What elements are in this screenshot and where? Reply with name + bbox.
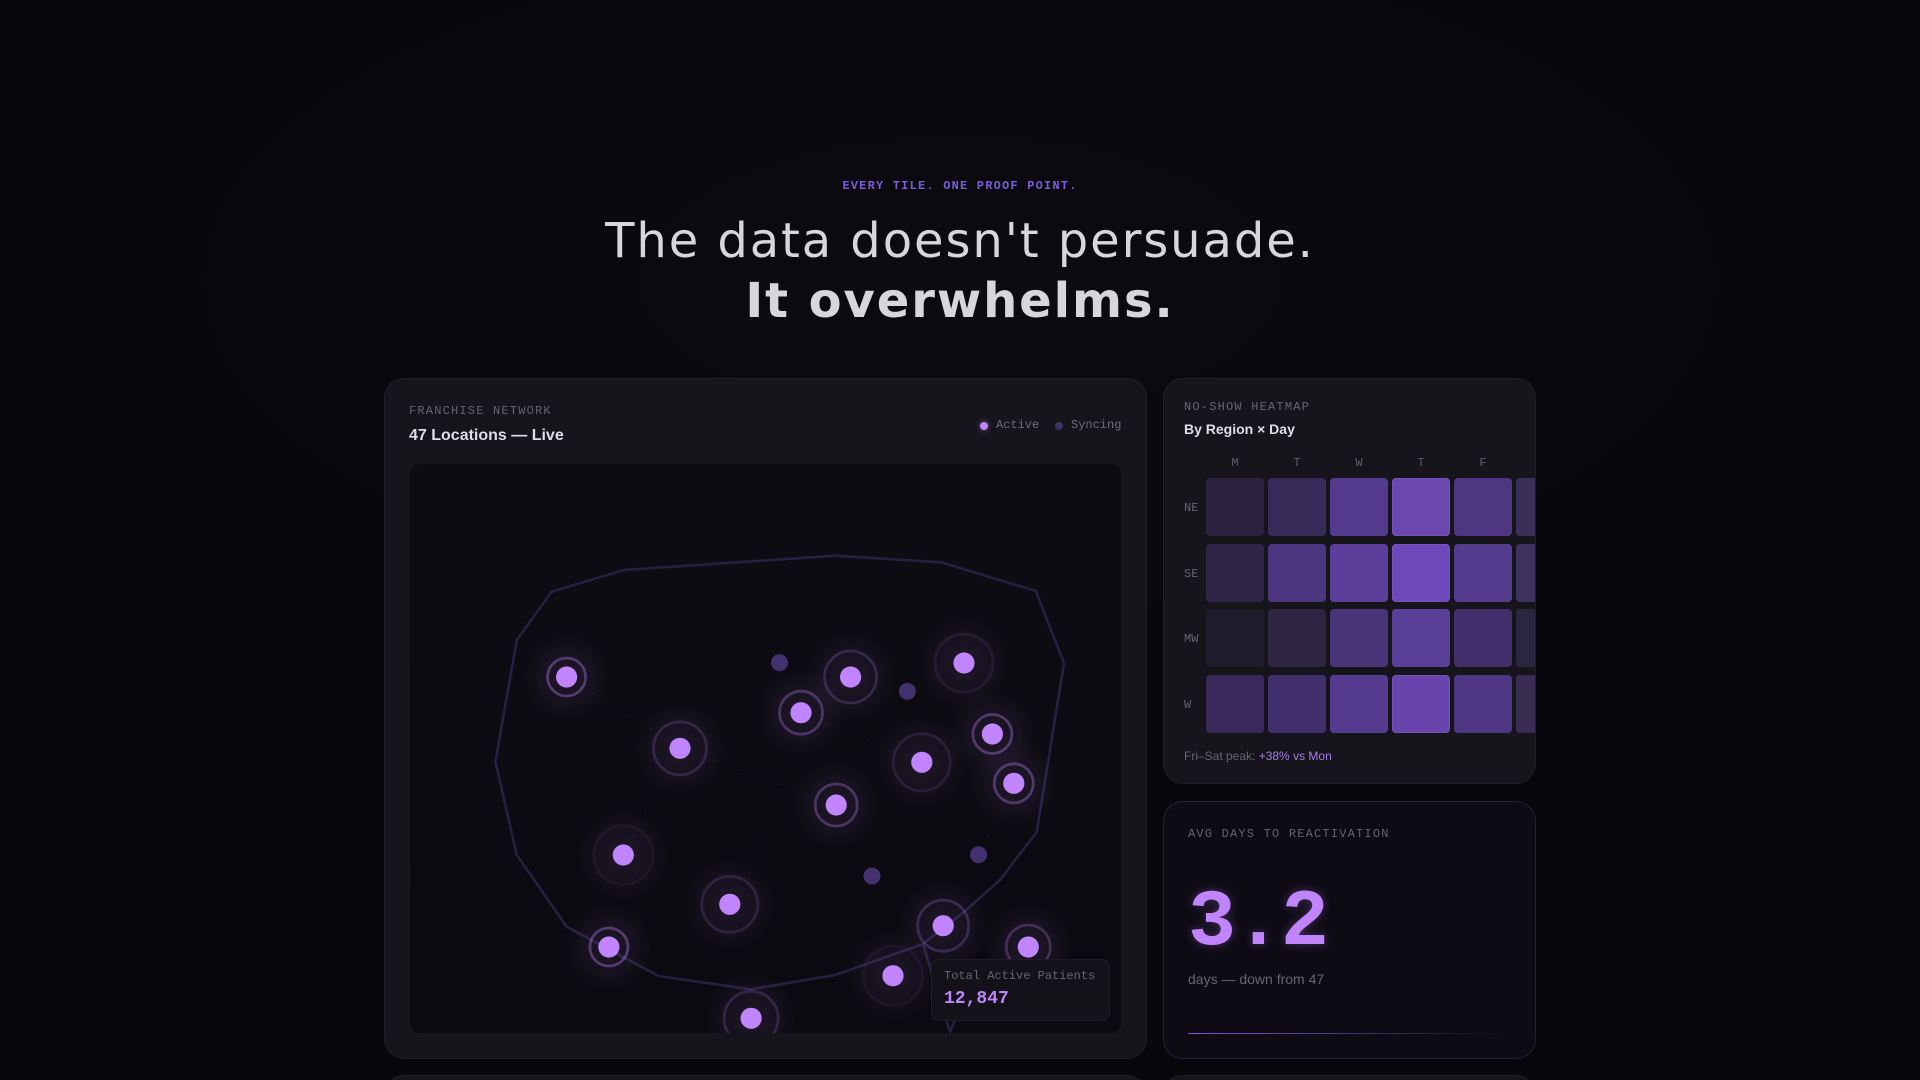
node glows [523, 617, 1072, 1064]
heatmap row: W [1184, 675, 1535, 733]
heatmap label: NO-SHOW HEATMAP [1184, 400, 1310, 414]
panel: lower right card edge [1170, 1075, 1529, 1080]
stat label: AVG DAYS TO REACTIVATION [1188, 827, 1390, 841]
heatmap row: NE [1184, 478, 1535, 536]
title: It overwhelms. [745, 273, 1175, 329]
panel: no-show heatmap [1163, 378, 1536, 784]
eyebrow: EVERY TILE. ONE PROOF POINT. [842, 179, 1078, 193]
legend: active: Active [996, 418, 1039, 432]
title: The data doesn't persuade. [605, 213, 1315, 269]
panel: average days to reactivation [1163, 801, 1536, 1059]
stat caption: days — down from 47 [1188, 971, 1324, 987]
network links [566, 677, 1014, 855]
map label: FRANCHISE NETWORK [409, 404, 552, 418]
heatmap heading: By Region × Day [1184, 421, 1295, 437]
title [605, 213, 1315, 329]
panel: lower left card edge [391, 1075, 1140, 1080]
stat underline [1188, 1033, 1508, 1034]
map outline [495, 556, 1064, 1032]
map canvas [410, 464, 1121, 1033]
day labels: T [1417, 456, 1425, 470]
active node dots [556, 652, 1039, 1029]
heatmap footnote: Fri–Sat peak: +38% vs Mon [1184, 749, 1332, 763]
heatmap row: SE [1184, 544, 1535, 602]
panel: franchise network map [384, 378, 1147, 1059]
node rings [548, 634, 1050, 1045]
heatmap row: MW: MW [1184, 632, 1198, 646]
heatmap row: SE: SE [1184, 567, 1198, 581]
tooltip value: 12,847 [944, 989, 1009, 1009]
day labels: W [1355, 456, 1363, 470]
tooltip label: Total Active Patients [944, 969, 1095, 983]
stat value: 3.2 [1188, 878, 1327, 969]
day labels: M [1231, 456, 1239, 470]
day labels: T [1293, 456, 1301, 470]
day labels [1231, 456, 1487, 470]
legend: syncing: Syncing [1071, 418, 1121, 432]
tooltip: total active patients [931, 959, 1110, 1021]
heatmap row: W: W [1184, 698, 1191, 712]
syncing node dots [771, 654, 987, 884]
legend: active [976, 418, 1039, 434]
heatmap row: MW [1184, 609, 1535, 667]
map heading: 47 Locations — Live [409, 427, 564, 444]
day labels: F [1479, 456, 1487, 470]
heatmap row: NE: NE [1184, 501, 1198, 515]
